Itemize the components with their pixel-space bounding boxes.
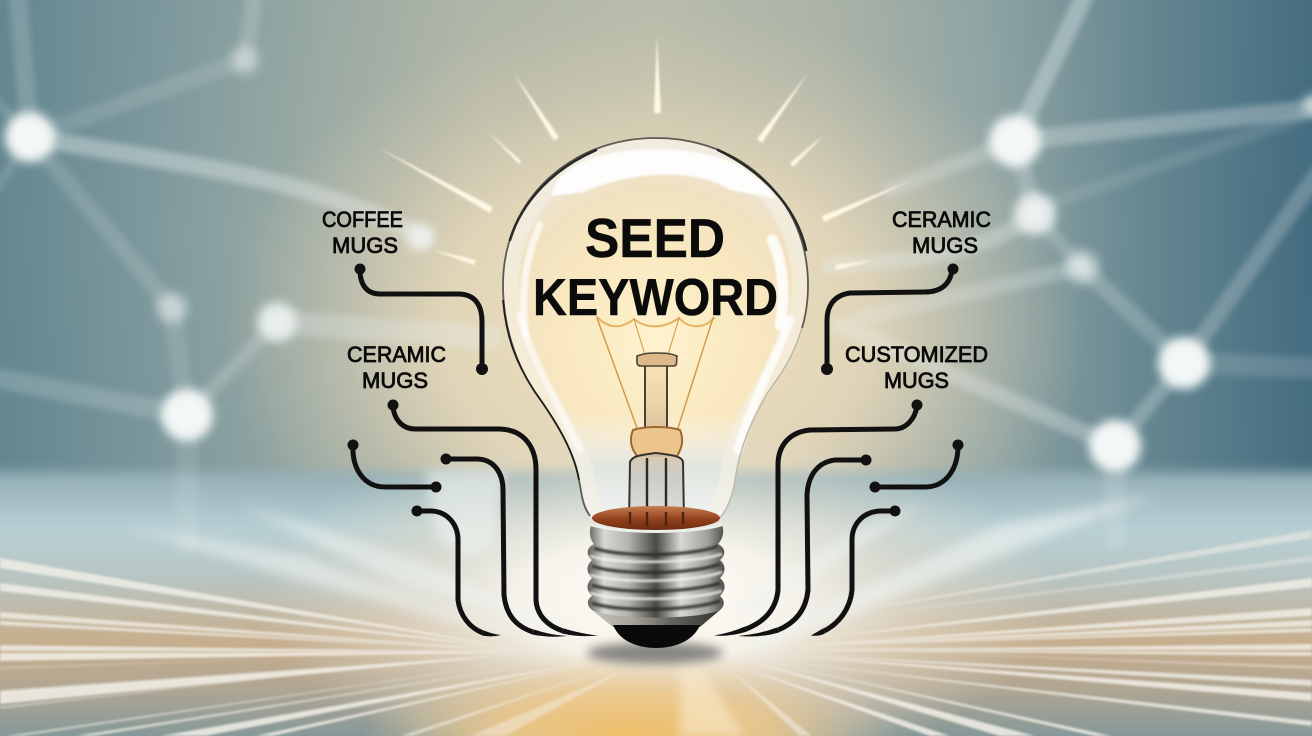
- headline: seed keyword: KEYWORD: [533, 269, 778, 327]
- connectors: left side: [348, 264, 598, 637]
- screw base: [588, 525, 724, 627]
- label: ceramic mugs right: CERAMIC: [892, 207, 991, 232]
- label: ceramic mugs left: CERAMIC: [347, 342, 446, 367]
- bulb shadow on floor: [587, 642, 723, 664]
- floor light rays: right: [680, 495, 1312, 736]
- headline: seed keyword: [533, 207, 778, 327]
- side glass reflections: [520, 225, 790, 450]
- label: ceramic mugs right: [892, 207, 991, 258]
- label: coffee mugs: MUGS: [332, 233, 398, 258]
- headline: seed keyword: SEED: [585, 207, 725, 269]
- connector: ceramic mugs to base: [388, 400, 598, 636]
- connector: right middle line: [738, 454, 872, 637]
- label: coffee mugs: COFFEE: [322, 207, 403, 232]
- connector: left middle line: [440, 454, 567, 637]
- top glass highlight: [552, 150, 774, 198]
- label: ceramic mugs right: MUGS: [912, 233, 978, 258]
- filament wires: [597, 317, 714, 428]
- label: ceramic mugs left: MUGS: [362, 368, 428, 393]
- sunburst rays above the bulb: [379, 36, 912, 270]
- connector: left lower line: [412, 506, 501, 636]
- inner glass rim: [503, 138, 808, 520]
- connectors: right side: [714, 264, 964, 637]
- label: customized mugs: [845, 342, 988, 393]
- label: coffee mugs: [322, 207, 403, 258]
- connector: short right elbow: [870, 440, 964, 492]
- label: customized mugs: MUGS: [884, 368, 949, 393]
- light bulb: [503, 138, 808, 664]
- label: customized mugs: CUSTOMIZED: [845, 342, 988, 367]
- floor light rays: left: [0, 470, 625, 736]
- connector: ceramic mugs right to bulb: [821, 264, 958, 375]
- copper collar opening: [592, 506, 720, 530]
- glass outline: [503, 138, 808, 516]
- label: ceramic mugs left: [347, 342, 446, 393]
- connector: customized mugs to base: [714, 400, 922, 636]
- black contact tip: [613, 625, 700, 648]
- glass envelope: [503, 138, 808, 520]
- glass stem: [629, 353, 684, 522]
- connector: coffee mugs to bulb: [354, 264, 488, 375]
- connector: short left elbow: [348, 440, 442, 492]
- connector: right lower line: [811, 506, 900, 636]
- network: right blurred nodes and links: [830, 0, 1312, 540]
- network: left blurred nodes and links: [0, 0, 490, 545]
